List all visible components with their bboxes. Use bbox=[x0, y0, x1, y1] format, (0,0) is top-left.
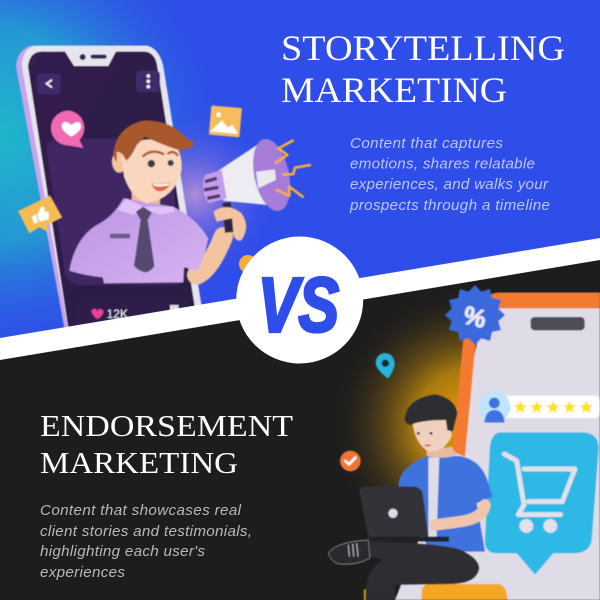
torso bbox=[398, 456, 493, 552]
text: endorsement description: Content that showcases real bbox=[40, 502, 242, 519]
title: endorsement marketing: ENDORSEMENT bbox=[40, 408, 293, 443]
divider band bbox=[0, 238, 600, 360]
features bbox=[417, 432, 432, 446]
face bbox=[413, 417, 452, 452]
video card bbox=[47, 139, 185, 285]
icon: heart bubble bbox=[51, 111, 84, 148]
tie bbox=[134, 207, 154, 272]
ear bbox=[112, 151, 127, 173]
text: storytelling description: emotions, shares relatable bbox=[350, 156, 535, 172]
laptop bbox=[359, 487, 449, 542]
illustration: shopper with phone bbox=[328, 285, 600, 600]
text: storytelling description: experiences, and walks your bbox=[350, 176, 549, 193]
icon: megaphone bbox=[203, 136, 310, 233]
text: endorsement description: experiences bbox=[40, 564, 125, 581]
rating bar bbox=[478, 391, 600, 423]
icon: percent badge bbox=[445, 285, 505, 345]
shoe bbox=[328, 540, 370, 564]
title: storytelling marketing: MARKETING bbox=[281, 70, 507, 110]
handle grip bbox=[224, 218, 233, 233]
menu button bbox=[136, 71, 160, 92]
phone body bbox=[16, 46, 202, 332]
eyes and mouth bbox=[143, 152, 177, 191]
legs bbox=[365, 542, 479, 600]
text: endorsement description bbox=[40, 502, 252, 581]
hair bbox=[405, 394, 457, 432]
phone speaker bbox=[531, 317, 585, 330]
text: storytelling description: Content that captures bbox=[350, 135, 503, 152]
title: storytelling marketing bbox=[281, 28, 565, 110]
vs badge bbox=[236, 236, 363, 364]
seat bbox=[364, 584, 507, 600]
text: storytelling description: prospects through a timeline bbox=[349, 197, 550, 214]
collar bbox=[117, 198, 175, 215]
title: endorsement marketing bbox=[40, 408, 293, 480]
icon: phone with presenter bbox=[16, 46, 310, 332]
text: endorsement description: highlighting each user's bbox=[40, 543, 205, 560]
panel: endorsement background bbox=[0, 250, 600, 600]
badge bbox=[110, 234, 130, 238]
likes bar bbox=[70, 298, 191, 327]
back button bbox=[37, 73, 61, 94]
presenter bbox=[69, 121, 223, 283]
likes bar: 12K bbox=[107, 307, 128, 321]
panel: storytelling background bbox=[0, 0, 600, 345]
big phone bbox=[395, 293, 600, 600]
vs badge: VS bbox=[258, 262, 339, 348]
title: endorsement marketing: MARKETING bbox=[40, 445, 238, 480]
neck bbox=[427, 447, 457, 458]
forearm bbox=[435, 505, 485, 525]
arm bbox=[197, 237, 223, 275]
shopper bbox=[328, 394, 493, 600]
icon: picture card bbox=[209, 105, 242, 137]
icon: percent badge: % bbox=[460, 301, 489, 334]
icon: orange blob behind badge bbox=[239, 255, 257, 273]
icon: thumbs up bubble bbox=[18, 196, 62, 233]
title: storytelling marketing: STORYTELLING bbox=[281, 28, 565, 68]
neck bbox=[132, 187, 160, 212]
shirt placket bbox=[428, 457, 439, 537]
notch camera bbox=[80, 54, 107, 60]
icon: shopping cart bubble bbox=[485, 432, 599, 575]
hand fingers bbox=[213, 207, 246, 241]
face bbox=[121, 139, 182, 203]
icon: check badge bbox=[340, 451, 361, 471]
hair bbox=[113, 121, 195, 162]
shirt bbox=[69, 198, 208, 283]
text: endorsement description: client stories and testimonials, bbox=[40, 523, 252, 540]
text: storytelling description bbox=[349, 135, 550, 214]
phone screen bbox=[28, 52, 195, 328]
icon: location pin bbox=[376, 353, 395, 379]
